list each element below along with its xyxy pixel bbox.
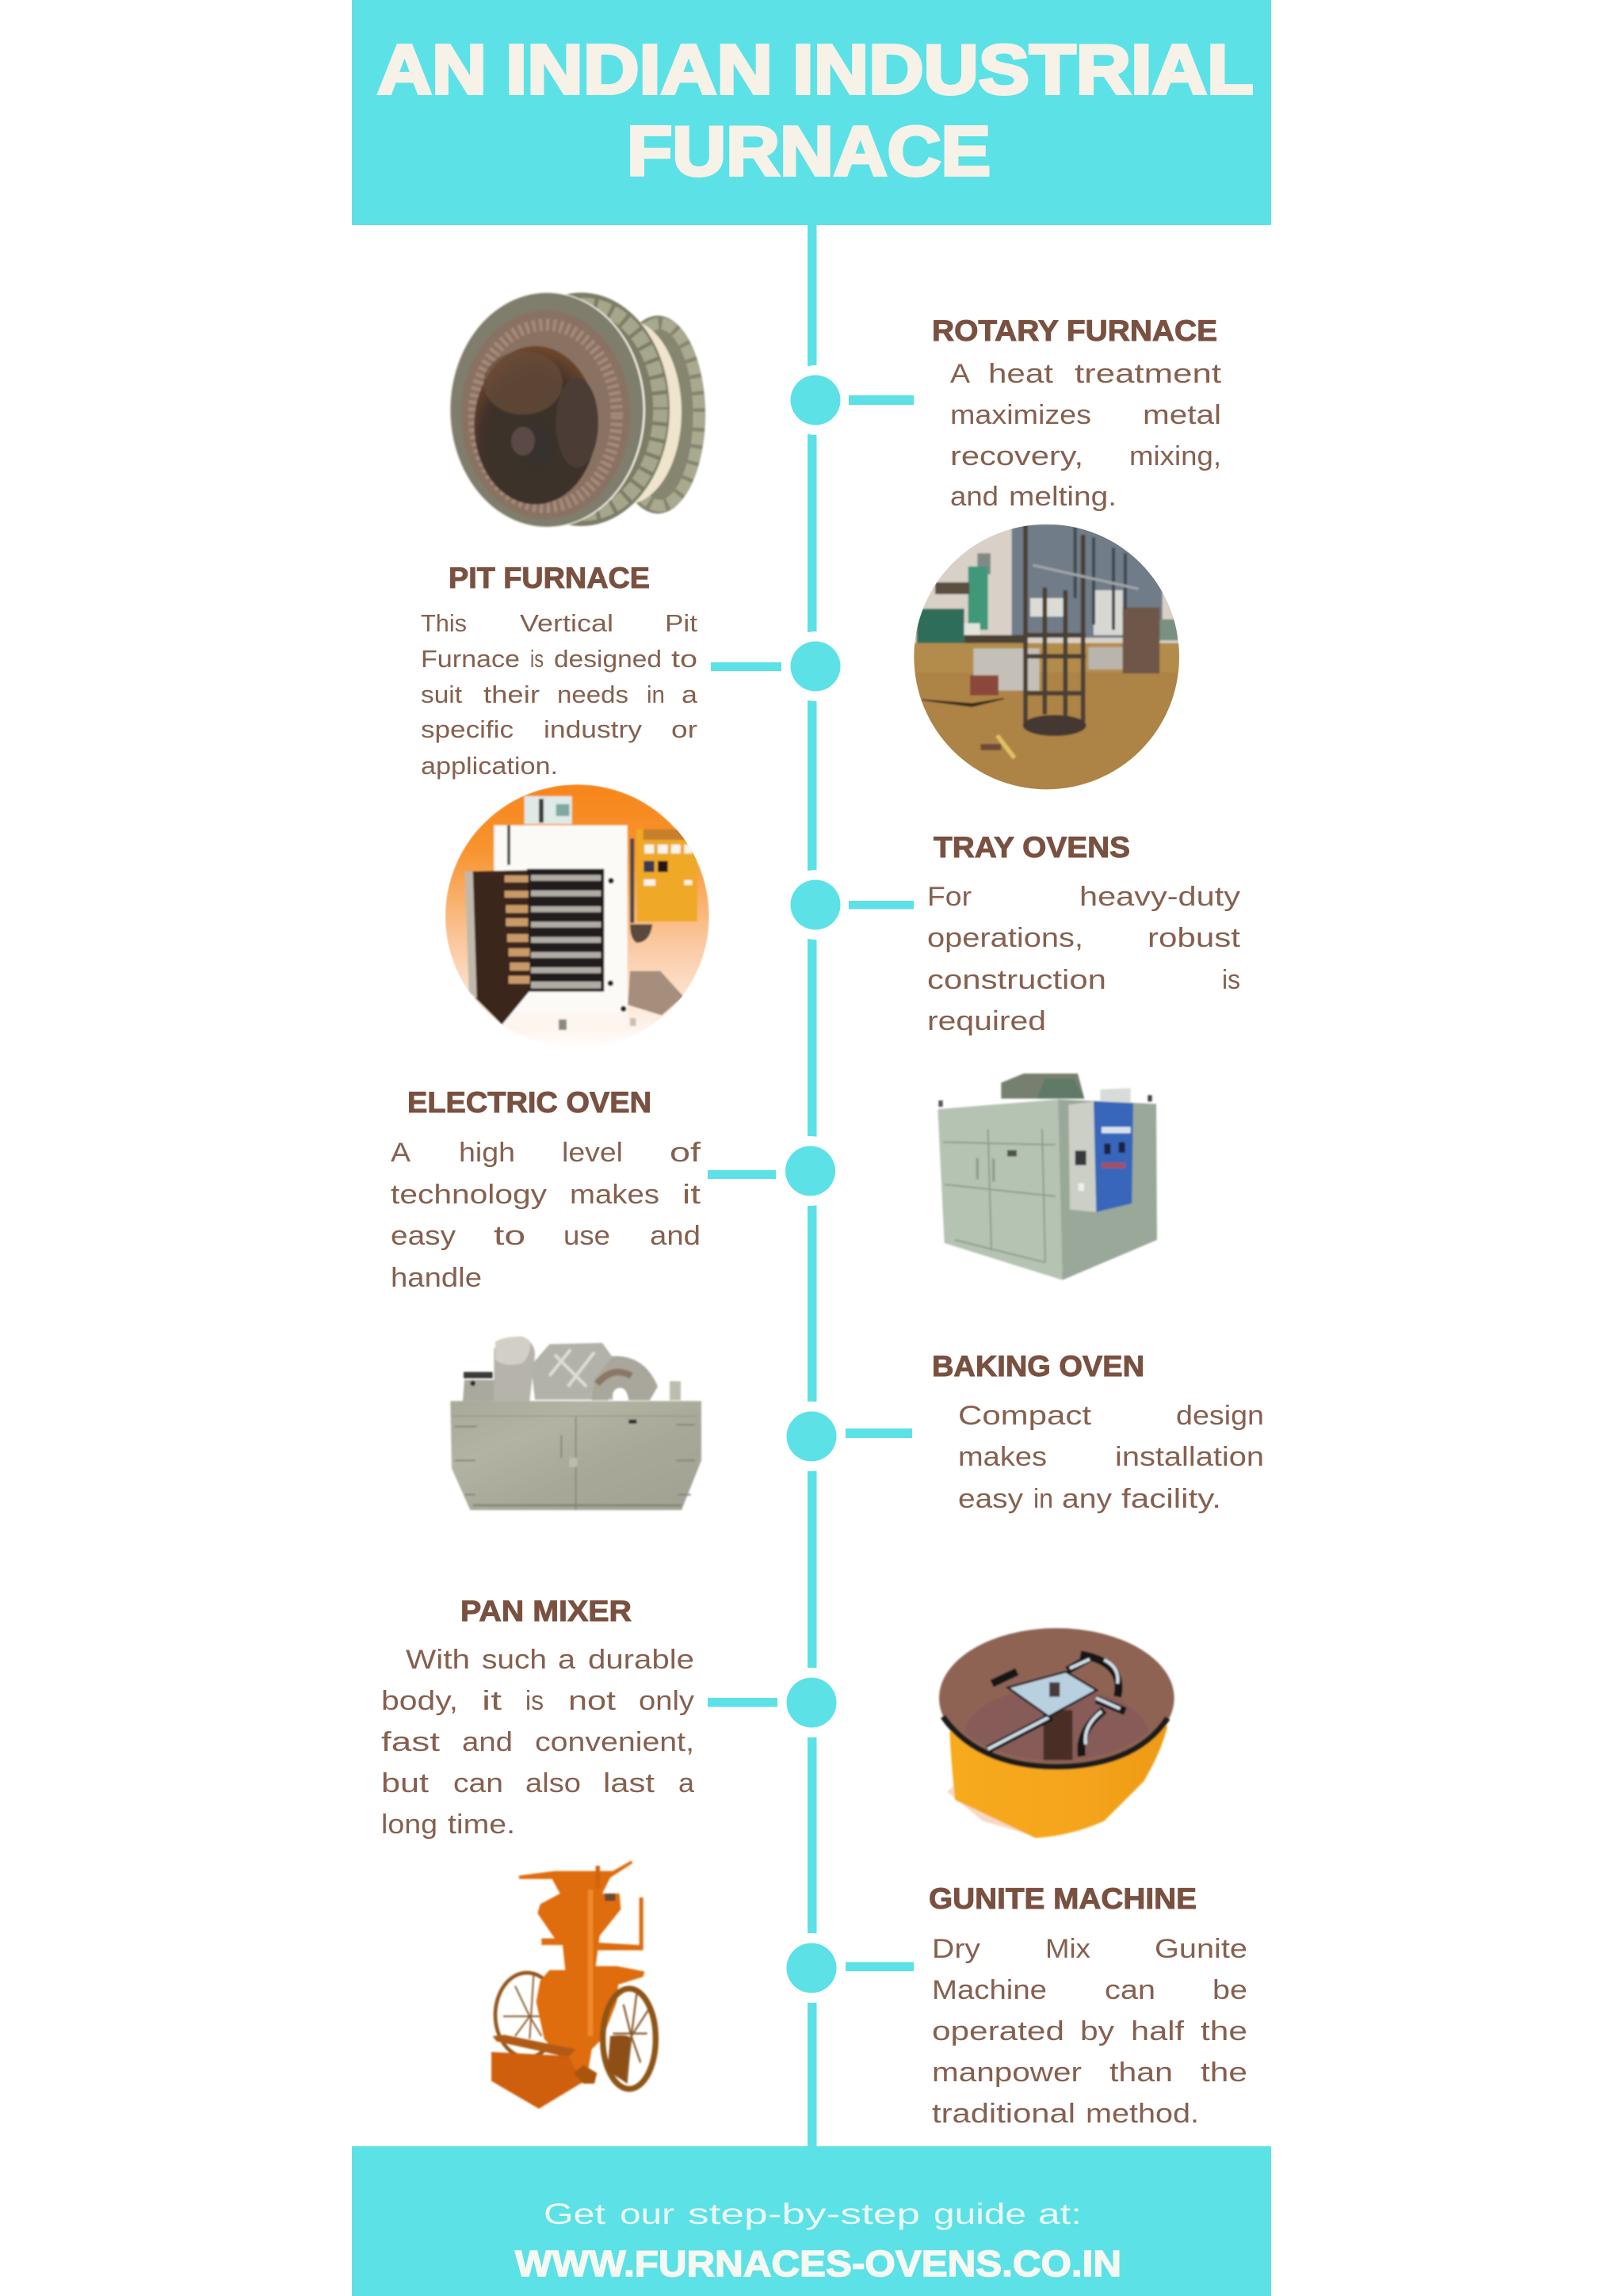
- gunite machine text: operated: [932, 2016, 1064, 2046]
- pit furnace text: in: [647, 681, 665, 708]
- photo: rotary furnace: [449, 292, 705, 528]
- electric oven text: easy: [391, 1221, 456, 1251]
- electric oven text: A: [391, 1138, 411, 1168]
- tray ovens text: is: [1222, 965, 1240, 995]
- photo: tray oven: [445, 784, 709, 1048]
- title: FURNACE: [627, 112, 991, 190]
- gunite machine text: by: [1080, 2016, 1114, 2046]
- pan mixer text: and: [462, 1727, 513, 1757]
- gunite machine text: can: [1105, 1975, 1155, 2005]
- baking oven text: makes: [958, 1442, 1047, 1472]
- title: INDIAN: [506, 30, 773, 109]
- pit furnace text: industry: [544, 715, 643, 743]
- gunite machine text: Mix: [1045, 1934, 1090, 1964]
- timeline spine: [808, 225, 816, 2146]
- gunite machine text: half: [1131, 2016, 1185, 2046]
- pan mixer text: PAN MIXER: [460, 1595, 632, 1627]
- tray ovens text: TRAY OVENS: [934, 831, 1130, 864]
- pit furnace text: to: [671, 645, 697, 673]
- rotary furnace text: mixing,: [1129, 441, 1221, 471]
- electric oven text: level: [562, 1138, 623, 1168]
- baking oven text: in: [1033, 1484, 1053, 1514]
- pit furnace text: Furnace: [421, 645, 520, 673]
- tray ovens text: required: [927, 1006, 1046, 1036]
- baking oven text: Compact: [958, 1401, 1092, 1431]
- baking oven text: [932, 1350, 1271, 1514]
- tray ovens text: [927, 831, 1247, 1036]
- electric oven text: and: [650, 1221, 701, 1251]
- gunite machine text: the: [1201, 2058, 1247, 2088]
- node: pan mixer: [708, 1668, 846, 1737]
- pan mixer text: also: [525, 1768, 581, 1798]
- pit furnace text: their: [483, 681, 540, 708]
- pan mixer text: a: [678, 1768, 694, 1798]
- electric oven text: ELECTRIC OVEN: [407, 1086, 651, 1119]
- photo: baking oven machine: [450, 1337, 701, 1510]
- pit furnace text: suit: [421, 681, 462, 708]
- node: electric oven: [708, 1136, 845, 1206]
- gunite machine text: Machine: [932, 1975, 1047, 2005]
- pan mixer text: such: [482, 1645, 547, 1675]
- pan mixer text: not: [568, 1686, 617, 1716]
- rotary furnace text: and: [950, 482, 999, 512]
- pit furnace text: or: [671, 715, 697, 743]
- pan mixer text: fast: [381, 1727, 441, 1757]
- baking oven text: easy: [958, 1484, 1023, 1514]
- gunite machine text: GUNITE MACHINE: [929, 1882, 1197, 1915]
- baking oven text: installation: [1115, 1442, 1264, 1472]
- footer url: WWW.FURNACES-OVENS.CO.IN: [515, 2243, 1121, 2284]
- pan mixer text: long: [381, 1810, 437, 1840]
- title: AN: [377, 30, 487, 109]
- electric oven text: of: [670, 1138, 701, 1168]
- electric oven text: it: [682, 1180, 701, 1210]
- pit furnace text: designed: [554, 645, 662, 673]
- tray ovens text: operations,: [927, 923, 1083, 953]
- baking oven text: BAKING OVEN: [932, 1350, 1144, 1383]
- photo: gunite machine: [491, 1860, 655, 2109]
- rotary furnace text: treatment: [1075, 359, 1222, 389]
- electric oven text: handle: [391, 1263, 482, 1293]
- baking oven text: design: [1176, 1401, 1264, 1431]
- gunite machine text: the: [1201, 2016, 1247, 2046]
- photo: pan mixer: [939, 1628, 1174, 1838]
- gunite machine text: than: [1109, 2058, 1173, 2088]
- baking oven text: any: [1062, 1484, 1112, 1514]
- pit furnace text: Pit: [665, 609, 697, 637]
- rotary furnace text: heat: [988, 359, 1054, 389]
- pan mixer text: is: [525, 1686, 544, 1716]
- pit furnace text: This: [421, 609, 467, 637]
- rotary furnace text: maximizes: [950, 400, 1091, 430]
- pan mixer text: durable: [588, 1645, 694, 1675]
- footer call to action: at:: [1038, 2198, 1082, 2230]
- pan mixer text: last: [603, 1768, 655, 1798]
- node: rotary furnace: [781, 365, 914, 435]
- rotary furnace text: metal: [1143, 400, 1221, 430]
- node: tray ovens: [781, 870, 914, 940]
- footer call to action: Get: [544, 2198, 606, 2230]
- pit furnace text: needs: [557, 681, 628, 708]
- header band: [352, 0, 1271, 225]
- pit furnace text: a: [682, 681, 698, 708]
- gunite machine text: method.: [1086, 2099, 1199, 2129]
- gunite machine text: be: [1212, 1975, 1247, 2005]
- electric oven text: use: [563, 1221, 610, 1251]
- pit furnace text: [421, 562, 705, 780]
- rotary furnace text: [932, 315, 1228, 512]
- electric oven text: technology: [391, 1180, 547, 1210]
- rotary furnace text: A: [950, 359, 970, 389]
- pan mixer text: convenient,: [535, 1727, 694, 1757]
- rotary furnace text: recovery,: [950, 441, 1083, 471]
- pit furnace text: is: [530, 645, 544, 673]
- pan mixer text: it: [482, 1686, 502, 1716]
- electric oven text: [391, 1086, 708, 1293]
- gunite machine text: traditional: [932, 2099, 1075, 2129]
- rotary furnace text: melting.: [1009, 482, 1117, 512]
- pan mixer text: time.: [448, 1810, 515, 1840]
- footer call to action: guide: [934, 2198, 1026, 2230]
- node: pit furnace: [711, 631, 850, 701]
- pit furnace text: PIT FURNACE: [449, 562, 650, 594]
- footer call to action: step-by-step: [688, 2198, 920, 2230]
- pan mixer text: With: [406, 1645, 470, 1675]
- pan mixer text: [381, 1595, 701, 1840]
- gunite machine text: manpower: [932, 2058, 1082, 2088]
- pan mixer text: body,: [381, 1686, 458, 1716]
- rotary furnace text: ROTARY FURNACE: [932, 315, 1217, 347]
- footer band: [352, 2146, 1271, 2296]
- pan mixer text: only: [639, 1686, 694, 1716]
- pit furnace text: Vertical: [520, 609, 613, 637]
- photo: electric oven cabinet: [938, 1074, 1157, 1280]
- photo: pit furnace site: [911, 519, 1186, 794]
- electric oven text: high: [459, 1138, 515, 1168]
- electric oven text: to: [494, 1221, 525, 1251]
- baking oven text: facility.: [1121, 1484, 1221, 1514]
- tray ovens text: construction: [927, 965, 1106, 995]
- title: INDUSTRIAL: [792, 30, 1252, 109]
- gunite machine text: [929, 1882, 1254, 2129]
- pan mixer text: a: [558, 1645, 575, 1675]
- pit furnace text: application.: [421, 752, 558, 780]
- tray ovens text: heavy-duty: [1079, 882, 1240, 912]
- gunite machine text: Dry: [932, 1934, 980, 1964]
- pan mixer text: can: [453, 1768, 503, 1798]
- pit furnace text: specific: [421, 715, 514, 743]
- tray ovens text: robust: [1148, 923, 1241, 953]
- node: gunite machine: [777, 1933, 914, 2003]
- node: baking oven: [777, 1402, 912, 1471]
- gunite machine text: Gunite: [1155, 1934, 1247, 1964]
- tray ovens text: For: [927, 882, 972, 912]
- footer call to action: our: [620, 2198, 674, 2230]
- pan mixer text: but: [381, 1768, 430, 1798]
- electric oven text: makes: [570, 1180, 659, 1210]
